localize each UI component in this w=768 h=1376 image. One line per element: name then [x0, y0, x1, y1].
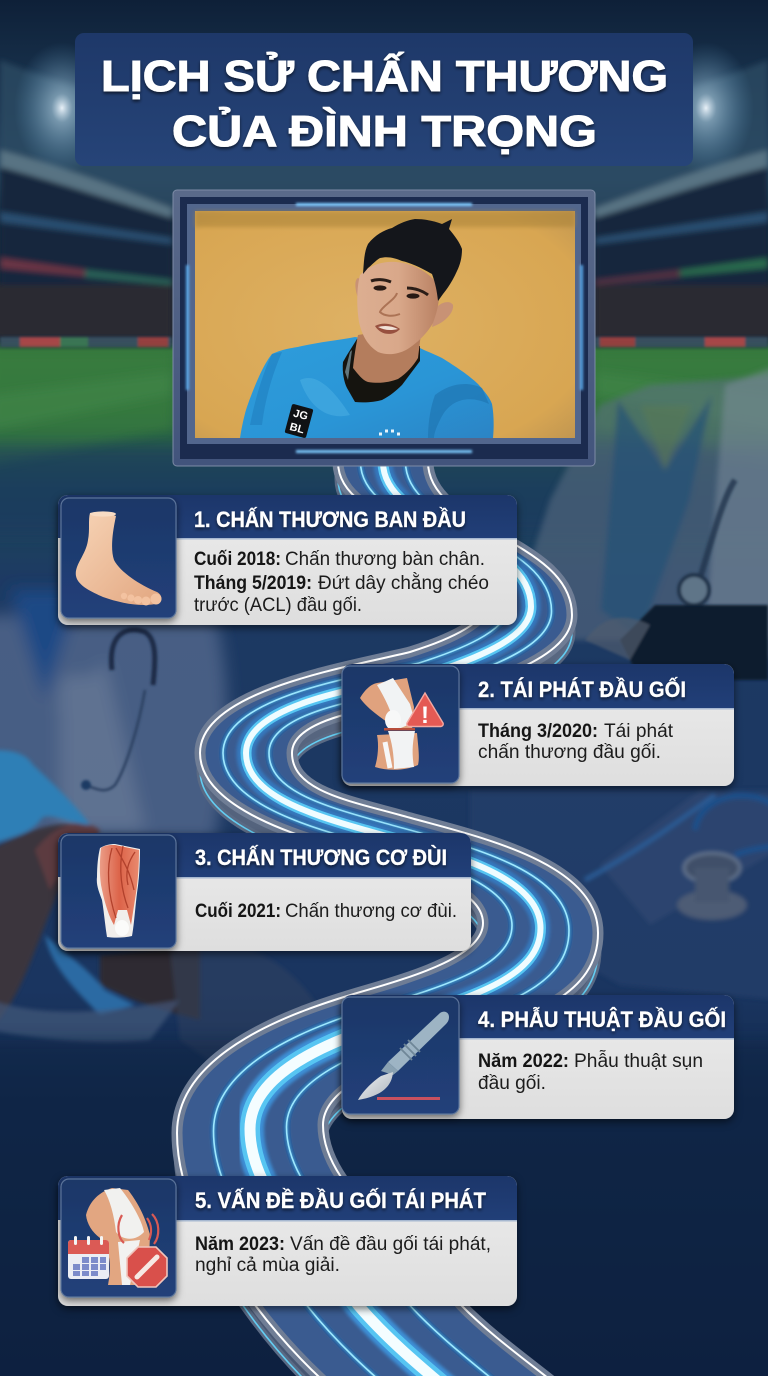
- heading: 5. VẤN ĐỀ ĐẦU GỐI TÁI PHÁT: [195, 1187, 486, 1213]
- body text: đầu gối.: [478, 1073, 546, 1094]
- body text: Năm 2023:: [195, 1234, 285, 1255]
- right doctor stethoscope and tablet: [585, 480, 768, 680]
- body text: Tái phát: [604, 721, 674, 742]
- body text: trước (ACL) đầu gối.: [194, 595, 362, 616]
- icon tile: scalpel: [342, 997, 459, 1114]
- eyes and brows: [371, 280, 428, 299]
- body text: Cuối 2018:: [194, 549, 281, 570]
- frame glow lights: [186, 203, 583, 453]
- black undershirt: [343, 339, 420, 402]
- body text: Phẫu thuật sụn: [574, 1050, 703, 1072]
- nose and mouth: [375, 293, 400, 334]
- doctor at left: [0, 590, 227, 840]
- photo frame: [173, 190, 595, 466]
- player photo: [195, 211, 575, 438]
- outer cyan stripes: [214, 462, 569, 1376]
- shirt badge: BL: [288, 421, 306, 436]
- road surface: [177, 462, 598, 1376]
- doctor at right: [505, 365, 768, 660]
- central glowing stripe: [246, 462, 540, 1376]
- card 5: recurring knee problem: [58, 1176, 517, 1306]
- card 3: thigh muscle injury: [58, 833, 471, 951]
- hair: [363, 219, 462, 301]
- heading: 1. CHẤN THƯƠNG BAN ĐẦU: [194, 507, 466, 532]
- shirt badge: JG: [292, 408, 309, 423]
- bottom darkening: [0, 1040, 768, 1376]
- icon tile: knee with warning: !: [421, 702, 429, 729]
- icon tile: foot: [61, 498, 176, 618]
- heading: 4. PHẪU THUẬT ĐẦU GỐI: [478, 1006, 726, 1032]
- floodlights: [14, 42, 754, 174]
- desk, stethoscope and papers: [470, 790, 768, 1000]
- ears: [432, 302, 453, 327]
- advertising boards: [0, 337, 768, 347]
- body text: Tháng 3/2020:: [478, 721, 598, 742]
- title text: [101, 50, 668, 156]
- card 2: knee recurrence: [342, 664, 734, 786]
- body text: Năm 2022:: [478, 1051, 569, 1072]
- body text: [194, 549, 489, 616]
- fade of pitch into navy: [0, 445, 768, 535]
- card 4: knee surgery: [342, 995, 734, 1119]
- body text: [195, 1234, 491, 1276]
- neck: [353, 325, 422, 383]
- body text: nghỉ cả mùa giải.: [195, 1255, 340, 1276]
- icon tile: knee, calendar and stop sign: [61, 1179, 176, 1297]
- stethoscope on left doctor: [81, 630, 155, 790]
- icon tile: knee with warning: [342, 666, 459, 783]
- body text: Đứt dây chằng chéo: [318, 572, 489, 594]
- shirt badge: [284, 404, 314, 438]
- body text: chấn thương đầu gối.: [478, 742, 661, 763]
- shirt crest: [379, 431, 400, 434]
- face: [357, 262, 439, 354]
- body text: [478, 1050, 703, 1094]
- heading: 3. CHẤN THƯƠNG CƠ ĐÙI: [195, 845, 447, 870]
- title text: CỦA ĐÌNH TRỌNG: [172, 105, 597, 156]
- body text: Tháng 5/2019:: [194, 573, 312, 594]
- body text: [195, 901, 457, 922]
- patient leg and gloved hands: [0, 750, 320, 1090]
- road side wall: [177, 479, 598, 1376]
- body text: Chấn thương cơ đùi.: [285, 901, 457, 922]
- pitch: [0, 352, 768, 465]
- body text: Cuối 2021:: [195, 901, 281, 922]
- body text: [478, 721, 674, 763]
- icon tile: thigh muscle: [61, 835, 176, 948]
- card 1: initial injury: [58, 495, 517, 625]
- body text: Chấn thương bàn chân.: [285, 549, 485, 570]
- title panel: [75, 33, 693, 166]
- stadium roofs and stands: [0, 60, 768, 345]
- shirt: [240, 337, 494, 438]
- title text: LỊCH SỬ CHẤN THƯƠNG: [101, 50, 668, 101]
- heading: 2. TÁI PHÁT ĐẦU GỐI: [478, 676, 686, 702]
- road edge bands: [177, 462, 598, 1376]
- body text: Vấn đề đầu gối tái phát,: [290, 1234, 491, 1255]
- flowing timeline road: [177, 462, 598, 1376]
